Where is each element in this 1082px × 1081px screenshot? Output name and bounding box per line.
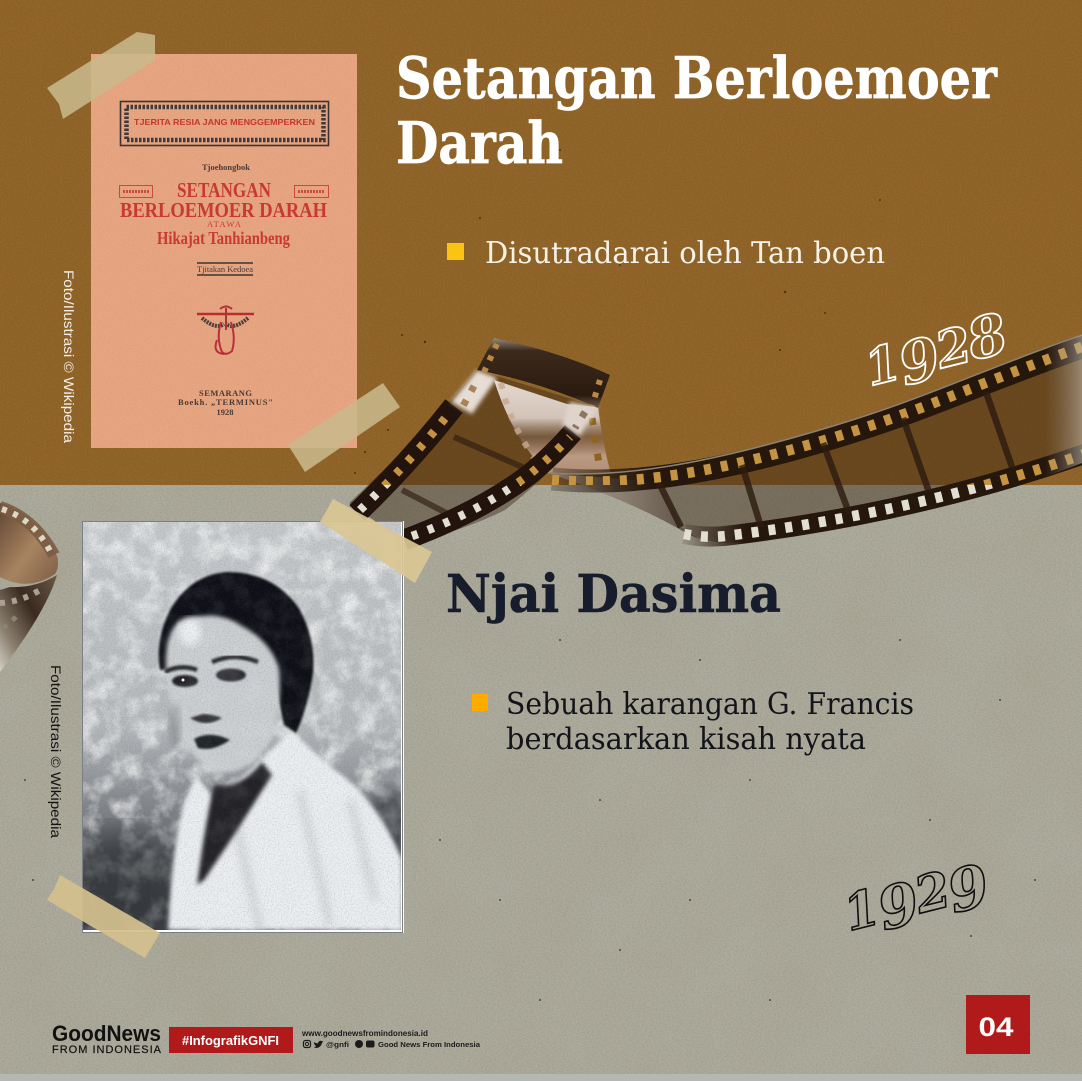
hair bbox=[159, 572, 314, 733]
film strip: long ribbon running to the right edge bbox=[548, 335, 1082, 543]
background: grey lower panel bbox=[0, 485, 1082, 1074]
eyes bbox=[172, 675, 198, 687]
heading: Setangan Berloemoer Darah: Darah bbox=[396, 110, 563, 177]
cover imprint: Boekh. „TERMINUS" bbox=[178, 397, 273, 407]
year 1928: 8 bbox=[959, 300, 1014, 374]
footer logo: GoodNews from Indonesia: FROM INDONESIA bbox=[52, 1044, 162, 1056]
tape on portrait bottom-left bbox=[47, 875, 160, 958]
tape on book top-left bbox=[47, 32, 155, 119]
year 1929: 9 bbox=[871, 868, 926, 944]
cover title: SETANGAN bbox=[177, 178, 271, 202]
bullet: author note bbox=[472, 687, 914, 757]
year 1929: 1 bbox=[838, 877, 886, 943]
film strip: falling front section frames bbox=[349, 370, 598, 543]
tape on portrait top-right bbox=[320, 499, 432, 583]
cover ornamental frame: TJERITA RESIA JANG MENGGEMPERKEN bbox=[134, 117, 315, 127]
background: bottom strip bbox=[0, 1074, 1082, 1081]
cover ornament left bbox=[120, 186, 152, 198]
bullet: author note: Sebuah karangan G. Francis bbox=[506, 687, 914, 722]
cover edition box: Tjitakan Kedoea bbox=[197, 264, 253, 274]
cover publisher line: Tjoehongbok bbox=[202, 162, 250, 172]
cover title: ATAWA bbox=[207, 219, 242, 229]
eyebrows bbox=[165, 657, 258, 672]
page number badge: 04 bbox=[978, 1012, 1014, 1042]
footer contacts and social icons: @gnfi bbox=[326, 1040, 349, 1049]
cover title: Hikajat Tanhianbeng bbox=[157, 228, 290, 248]
face bbox=[166, 616, 280, 772]
nose and mouth bbox=[190, 714, 222, 723]
cover imprint: SEMARANG bbox=[199, 388, 252, 398]
heading: Setangan Berloemoer Darah: Setangan Berloemoer bbox=[396, 45, 998, 112]
cover title bbox=[120, 178, 327, 248]
blouse bbox=[168, 730, 402, 930]
year 1928: 2 bbox=[928, 314, 977, 380]
footer contacts and social icons: Good News From Indonesia bbox=[378, 1040, 481, 1049]
heading: Njai Dasima: Njai Dasima bbox=[446, 564, 781, 625]
film strip: left roll at page edge bbox=[0, 503, 58, 672]
year 1928: 9 bbox=[892, 323, 947, 399]
book cover photo bbox=[91, 54, 357, 448]
cover ornament right bbox=[294, 186, 328, 198]
tape on book bottom-right bbox=[288, 383, 400, 472]
footer contacts and social icons bbox=[301, 1029, 481, 1049]
cover title: BERLOEMOER DARAH bbox=[120, 198, 327, 222]
footer contacts and social icons: www.goodnewsfromindonesia.id bbox=[301, 1029, 428, 1038]
page number badge bbox=[966, 995, 1030, 1054]
neck shadow bbox=[197, 762, 272, 885]
bullet: author note: berdasarkan kisah nyata bbox=[506, 722, 866, 757]
year 1928: 1 bbox=[859, 332, 907, 398]
footer tag: InfografikGNFI: #InfografikGNFI bbox=[182, 1034, 279, 1048]
film strip: light band on right edge of the loop bbox=[562, 402, 598, 436]
film strip: dark top of the loop bbox=[477, 338, 610, 408]
year 1929: 2 bbox=[907, 859, 956, 925]
heading: Setangan Berloemoer Darah bbox=[396, 45, 998, 177]
footer logo: GoodNews from Indonesia bbox=[52, 1021, 162, 1056]
paper specks bbox=[24, 149, 1036, 1001]
bullet: director: Disutradarai oleh Tan boen bbox=[485, 236, 885, 271]
portrait photo of Njai Dasima bbox=[82, 521, 404, 933]
footer logo: GoodNews from Indonesia: GoodNews bbox=[52, 1021, 161, 1046]
footer tag: InfografikGNFI bbox=[169, 1027, 293, 1053]
film strip: sprocket bands of the falling section bbox=[357, 406, 573, 540]
year 1929: 9 bbox=[941, 851, 996, 927]
film strip: curled back of the loop bbox=[494, 380, 611, 475]
cover ornamental frame bbox=[120, 102, 328, 146]
photo credit top: Foto/Ilustrasi © Wikipedia bbox=[61, 270, 77, 443]
photo credit bottom: Foto/Ilustrasi © Wikipedia bbox=[48, 665, 64, 838]
cover imprint: 1928 bbox=[216, 407, 234, 417]
cover emblem bbox=[197, 306, 254, 354]
background: brown upper panel bbox=[0, 0, 1082, 485]
cover imprint bbox=[178, 388, 273, 417]
film strip: light band on left edge of the loop bbox=[451, 370, 497, 414]
